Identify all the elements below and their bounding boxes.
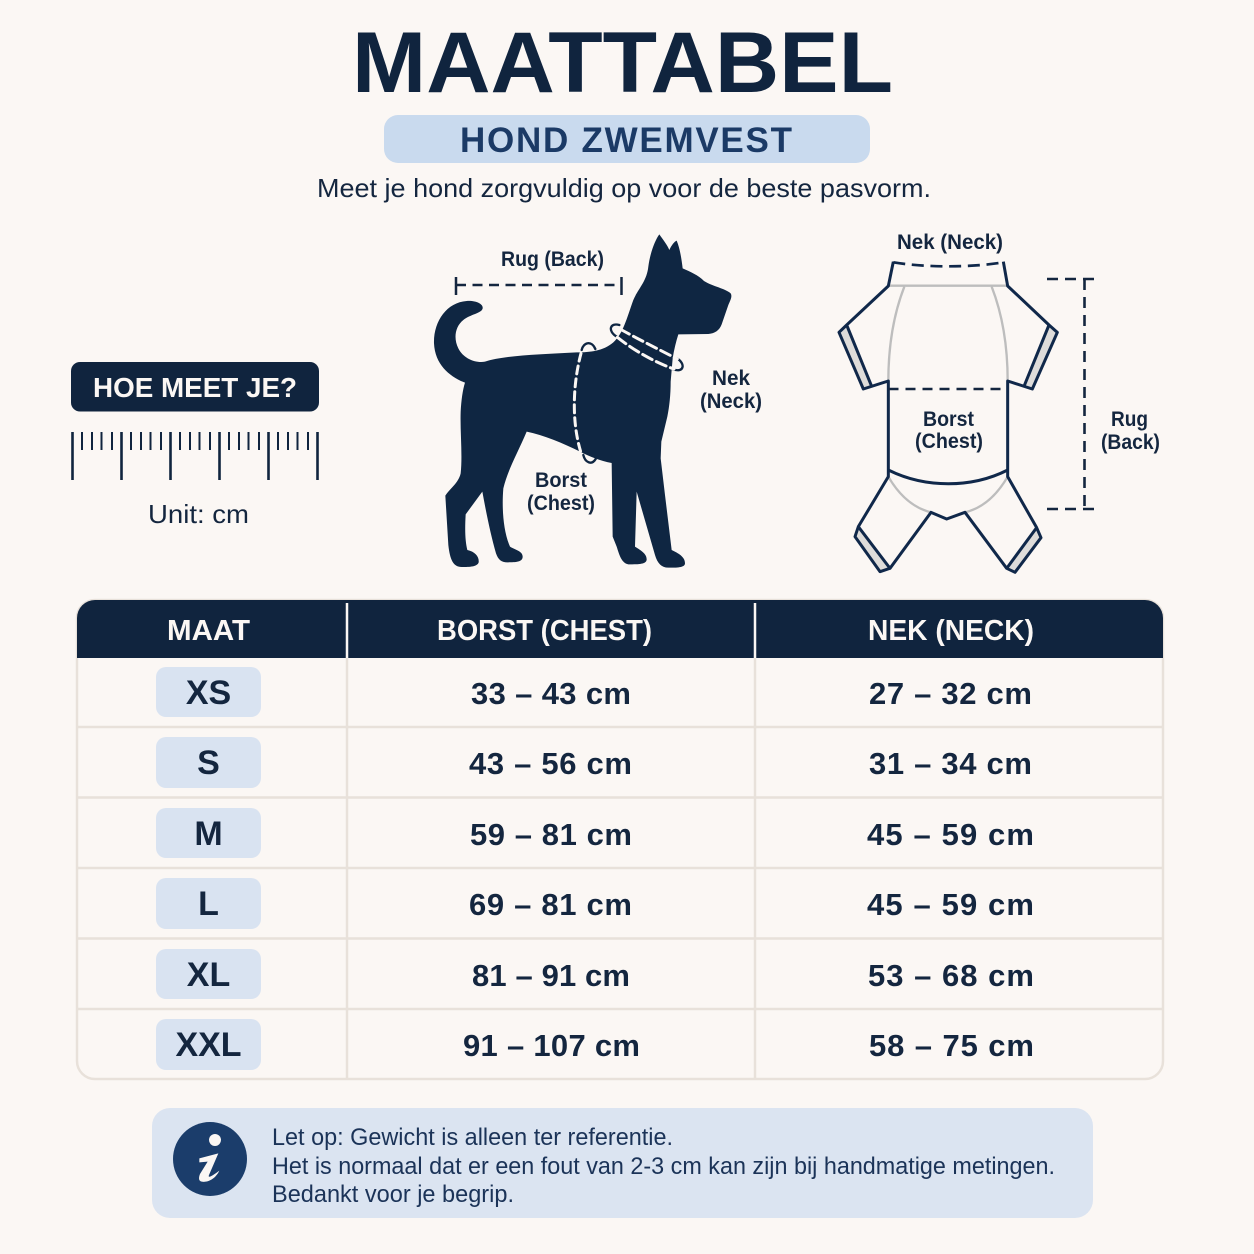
row XXL: XXL — [175, 1026, 242, 1064]
label: neck: Nek — [712, 367, 750, 390]
label: chest: Borst — [923, 408, 974, 431]
label: chest: (Chest) — [915, 430, 983, 453]
how to measure badge: HOE MEET JE? — [93, 372, 297, 403]
row XL: 53 – 68 cm — [868, 958, 1034, 993]
subtitle banner: HOND ZWEMVEST — [460, 121, 792, 160]
row XL: 81 – 91 cm — [472, 958, 630, 993]
label: chest: (Chest) — [527, 492, 595, 515]
label: neck — [700, 367, 762, 413]
dog silhouette — [434, 234, 731, 568]
unit label: Unit: cm — [148, 499, 249, 529]
label: back: Rug — [1111, 408, 1148, 431]
row S — [156, 737, 1032, 788]
table header: NEK (NECK) — [868, 615, 1034, 647]
row L: L — [198, 885, 219, 923]
note text: Let op: Gewicht is alleen ter referentie. — [272, 1124, 673, 1151]
row M: M — [194, 815, 223, 853]
row S: 31 – 34 cm — [869, 746, 1032, 781]
row XS: 27 – 32 cm — [869, 676, 1032, 711]
label: chest — [915, 408, 983, 453]
label: back: (Back) — [1101, 431, 1160, 454]
dog diagram — [434, 234, 762, 568]
row S: S — [197, 744, 220, 782]
ruler — [72, 432, 318, 480]
back measuring bracket — [1047, 279, 1099, 509]
table header — [77, 600, 1163, 658]
chest measuring line — [574, 343, 596, 463]
title: MAATTABEL — [352, 15, 893, 111]
row L: 69 – 81 cm — [469, 887, 632, 922]
size table — [77, 600, 1163, 1079]
row XS: XS — [186, 674, 231, 712]
row S: 43 – 56 cm — [469, 746, 632, 781]
label: chest — [527, 469, 595, 515]
label: neck: (Neck) — [700, 390, 762, 413]
note text — [272, 1124, 1055, 1208]
note text: Het is normaal dat er een fout van 2-3 cm kan zijn bij handmatige metingen. — [272, 1153, 1055, 1180]
row L — [156, 878, 1034, 929]
table header: MAAT — [167, 615, 250, 647]
chest measuring line — [888, 388, 1008, 390]
row M — [156, 808, 1034, 858]
row L: 45 – 59 cm — [867, 887, 1034, 922]
row M: 59 – 81 cm — [470, 817, 632, 852]
label: back: Rug (Back) — [501, 248, 604, 271]
how to measure panel — [71, 362, 319, 529]
how to measure badge — [71, 362, 319, 412]
row XXL: 91 – 107 cm — [463, 1028, 640, 1063]
row M: 45 – 59 cm — [867, 817, 1034, 852]
label: chest: Borst — [535, 469, 587, 492]
subtitle banner — [384, 115, 870, 163]
row XS: 33 – 43 cm — [471, 676, 631, 711]
row XS — [156, 667, 1032, 717]
row XL: XL — [187, 956, 230, 994]
swim vest diagram — [839, 231, 1160, 572]
vest outline — [839, 262, 1057, 572]
back measuring line — [456, 277, 622, 295]
row XL — [156, 949, 1034, 999]
intro text: Meet je hond zorgvuldig op voor de beste pasvorm. — [317, 173, 931, 203]
note text: Bedankt voor je begrip. — [272, 1181, 514, 1208]
table frame — [77, 600, 1163, 1079]
note panel — [152, 1108, 1093, 1218]
row XXL: 58 – 75 cm — [869, 1028, 1034, 1063]
neck measuring line — [611, 325, 683, 370]
label: neck: Nek (Neck) — [897, 231, 1003, 254]
row XXL — [156, 1019, 1034, 1070]
icon: info — [173, 1122, 247, 1196]
label: back — [1101, 408, 1160, 454]
table header: BORST (CHEST) — [437, 615, 652, 647]
